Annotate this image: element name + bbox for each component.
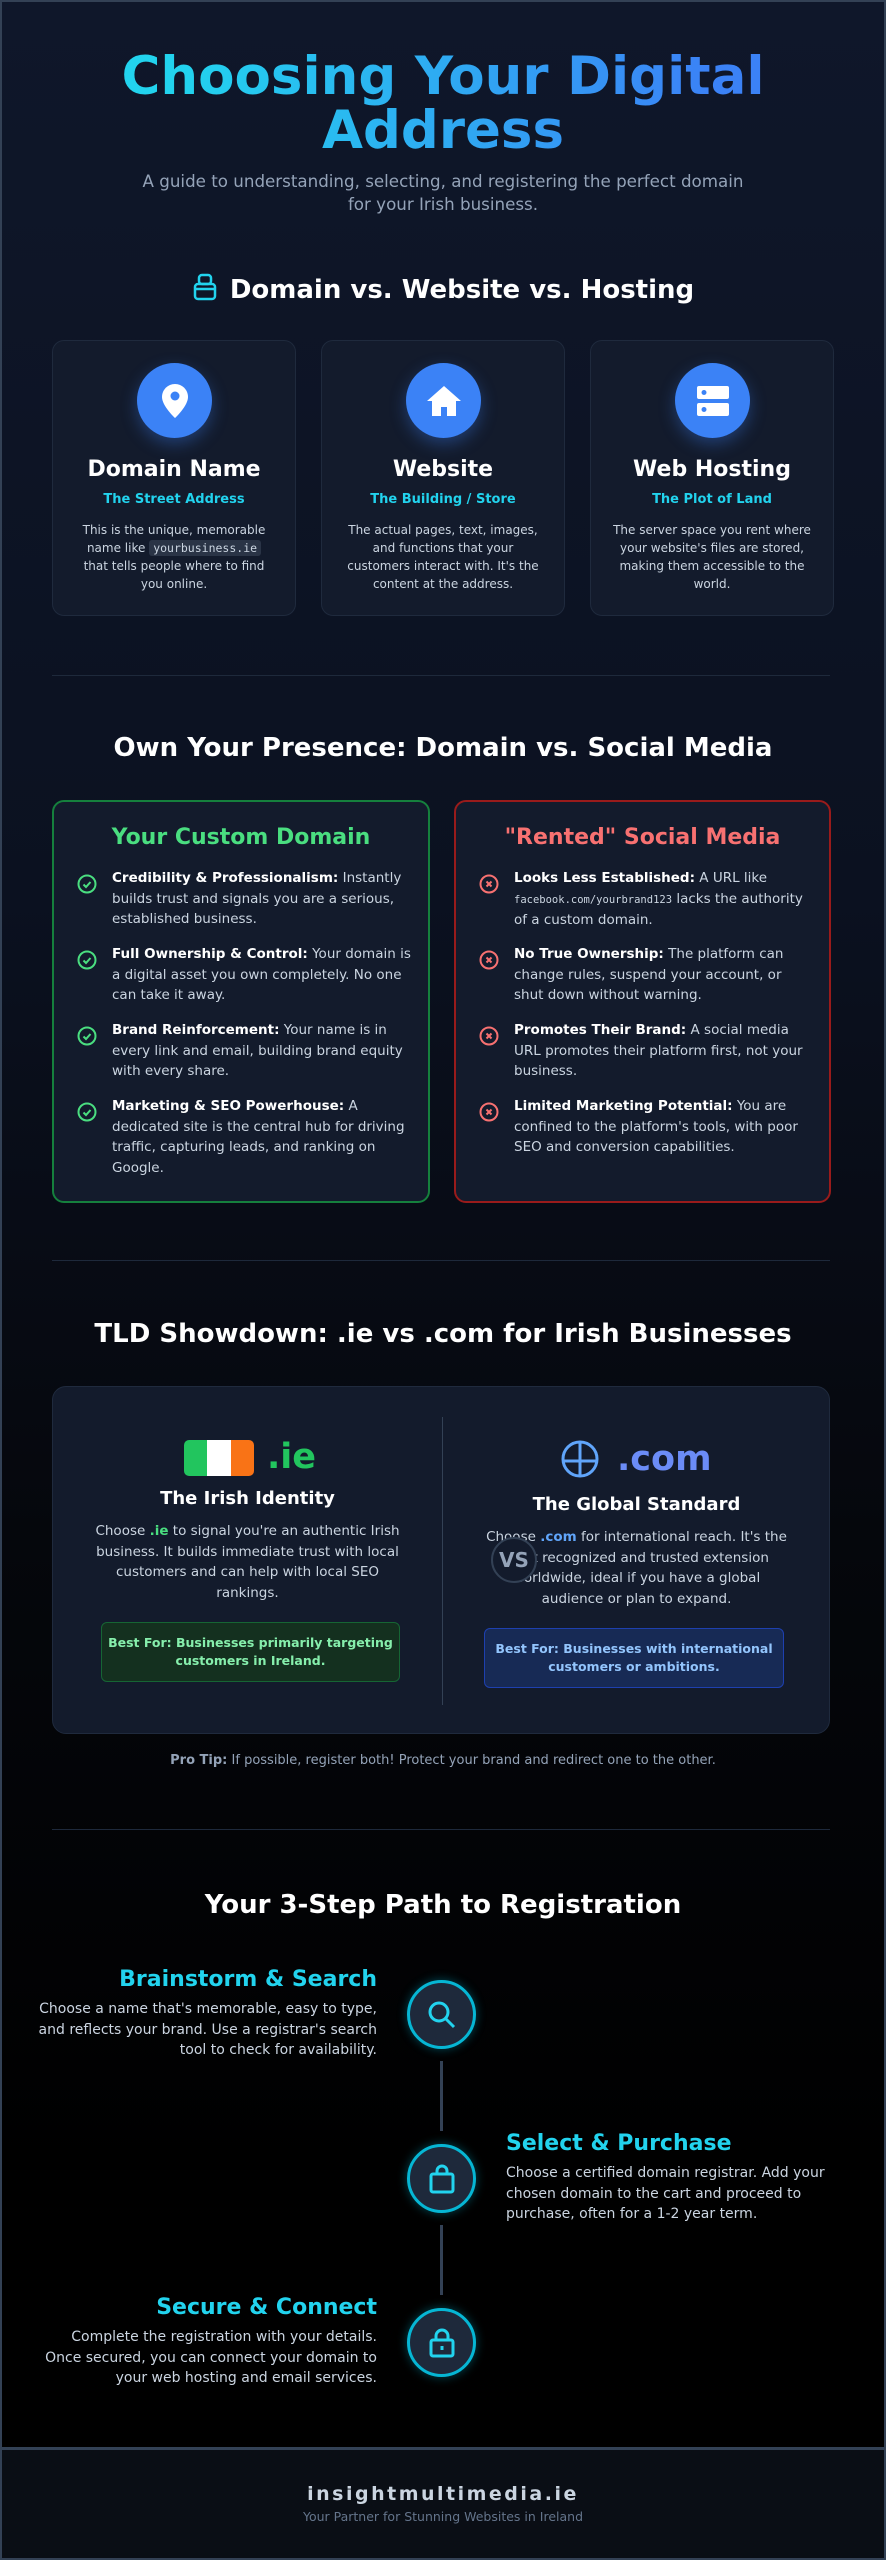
card: web hosting: making them accessible to the [619, 559, 805, 573]
icon: globe [562, 1440, 598, 1478]
step 1: brainstorm [39, 1967, 377, 2058]
text: com description: worldwide, ideal if you have a global [513, 1570, 760, 1586]
item: credibility: Credibility & Professionalism: Instantly builds trust and signals you are a serious, established business. [112, 870, 401, 927]
text: ie description: customers and can help with local SEO [116, 1564, 379, 1580]
panel: custom domain [52, 800, 430, 1203]
item: limited marketing: Limited Marketing Potential: You are confined to the platform's tools, with poor SEO and conversion capabilities. [514, 1098, 798, 1155]
label: .com: .com [617, 1439, 712, 1479]
icon: irish flag [184, 1440, 254, 1476]
step 3: secure [45, 2295, 377, 2386]
card: domain name: name like yourbusiness.ie [87, 541, 257, 555]
heading: irish identity: The Irish Identity [160, 1488, 335, 1509]
callout: best for ie: Best For: Businesses primarily targeting [108, 1635, 393, 1650]
text: ie description: rankings. [216, 1584, 279, 1600]
footer: insightmultimedia.ie [307, 2483, 579, 2505]
card: web hosting: your website's files are stored, [620, 541, 804, 555]
title [2, 50, 884, 158]
heading: own your presence: Own Your Presence: Domain vs. Social Media [114, 733, 772, 763]
heading: domain vs website vs hosting: Domain vs. Website vs. Hosting [230, 275, 694, 305]
icon: search circle [407, 1980, 476, 2049]
step 1: brainstorm: and reflects your brand. Use a registrar's search [39, 2022, 377, 2038]
step 3: secure: Secure & Connect [156, 2295, 377, 2320]
panel: social media: "Rented" Social Media [505, 825, 780, 850]
card: web hosting: world. [694, 577, 730, 591]
title: Address [322, 100, 564, 161]
step 2: select [506, 2131, 825, 2222]
icon: lock circle [407, 2308, 476, 2377]
card: domain name: Domain Name [87, 457, 261, 482]
card: website: content at the address. [373, 577, 513, 591]
step 1: brainstorm: tool to check for availability. [180, 2042, 377, 2058]
step 1: brainstorm: Choose a name that's memorable, easy to type, [39, 2001, 377, 2017]
card: web hosting: Web Hosting [633, 457, 791, 482]
icon: location pin [137, 363, 212, 438]
card: domain name: you online. [141, 577, 207, 591]
item: promotes their brand: Promotes Their Brand: A social media URL promotes their platform first, not your business. [514, 1022, 803, 1079]
card: website: customers interact with. It's the [347, 559, 539, 573]
heading: tld showdown: TLD Showdown: .ie vs .com for Irish Businesses [94, 1319, 792, 1349]
step 2: select: Select & Purchase [506, 2131, 732, 2156]
label: .ie: .ie [267, 1437, 316, 1477]
text: com description: most recognized and trusted extension [504, 1550, 769, 1566]
card: web hosting [590, 340, 834, 616]
subtitle [142, 171, 743, 214]
step 3: secure: your web hosting and email services. [116, 2370, 377, 2386]
card: website: The Building / Store [370, 492, 516, 507]
pro tip: Pro Tip: If possible, register both! Protect your brand and redirect one to the other. [170, 1753, 716, 1768]
card: website [321, 340, 565, 616]
card: web hosting: The Plot of Land [652, 492, 772, 507]
heading: 3-step path: Your 3-Step Path to Registration [205, 1890, 681, 1920]
text: ie description [95, 1523, 400, 1600]
callout: best for com [484, 1628, 784, 1688]
panel: social media [454, 800, 831, 1203]
icon: shopping bag circle [407, 2144, 476, 2213]
step 2: select: purchase, often for a 1-2 year term. [506, 2206, 757, 2222]
item: marketing: Marketing & SEO Powerhouse: A dedicated site is the central hub for driving traffic, capturing leads, and ranking on Google. [112, 1098, 405, 1176]
subtitle: A guide to understanding, selecting, and registering the perfect domain [143, 171, 743, 191]
item: less established: Looks Less Established: A URL like facebook.com/yourbrand123 lacks the authority of a custom domain. [514, 870, 803, 928]
badge: vs: VS [499, 1548, 529, 1572]
text: ie description: Choose .ie to signal you're an authentic Irish [95, 1523, 400, 1539]
subtitle: for your Irish business. [348, 194, 538, 214]
card: domain name: The Street Address [103, 492, 245, 507]
card: website: Website [393, 457, 493, 482]
icon: server [675, 363, 750, 438]
footer: Your Partner for Stunning Websites in Ireland [303, 2509, 583, 2524]
item: ownership: Full Ownership & Control: Your domain is a digital asset you own completely. No one can take it away. [112, 946, 411, 1003]
item: brand: Brand Reinforcement: Your name is in every link and email, building brand equity with every share. [112, 1022, 403, 1079]
card: domain name: that tells people where to find [84, 559, 264, 573]
item: no ownership: No True Ownership: The platform can change rules, suspend your account, or shut down without warning. [514, 946, 783, 1003]
icon: house [406, 363, 481, 438]
card: domain name: This is the unique, memorable [83, 523, 265, 537]
heading: global standard: The Global Standard [533, 1494, 740, 1515]
panel: custom domain: Your Custom Domain [112, 825, 370, 850]
card: website: The actual pages, text, images, [348, 523, 538, 537]
callout: best for com: customers or ambitions. [548, 1659, 720, 1674]
text: com description: Choose .com for international reach. It's the [486, 1529, 787, 1545]
text: com description: audience or plan to expand. [542, 1590, 731, 1606]
text: ie description: business. It builds immediate trust with local [96, 1544, 399, 1560]
step 2: select: Choose a certified domain registrar. Add your [506, 2165, 825, 2181]
title: Choosing Your Digital [121, 46, 765, 107]
card: website: and functions that your [373, 541, 513, 555]
step 1: brainstorm: Brainstorm & Search [119, 1967, 377, 1992]
callout: best for com: Best For: Businesses with international [495, 1641, 773, 1656]
callout: best for ie [101, 1622, 400, 1682]
step 3: secure: Once secured, you can connect your domain to [45, 2350, 377, 2366]
step 3: secure: Complete the registration with your details. [71, 2329, 377, 2345]
step 2: select: chosen domain to the cart and proceed to [506, 2186, 801, 2202]
card: domain name [52, 340, 296, 616]
badge: vs [491, 1537, 537, 1583]
callout: best for ie: customers in Ireland. [176, 1653, 325, 1668]
panel: tld comparison [52, 1386, 830, 1734]
card: web hosting: The server space you rent where [613, 523, 811, 537]
footer [2, 2447, 884, 2560]
text: com description [486, 1529, 787, 1606]
